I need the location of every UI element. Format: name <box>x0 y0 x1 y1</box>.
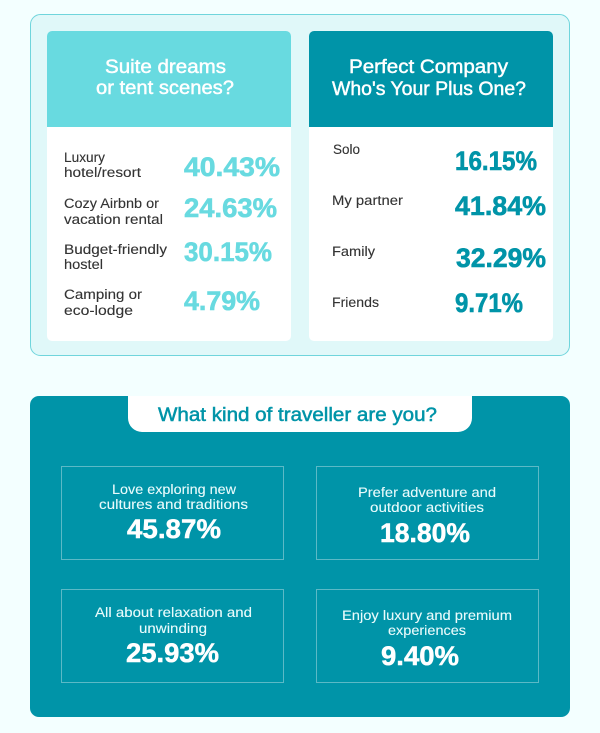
panel: suite dreams card <box>47 31 291 341</box>
row: airbnb: vacation rental <box>64 212 163 227</box>
row: my partner: My partner <box>332 193 404 208</box>
row: airbnb: Cozy Airbnb or <box>64 196 160 211</box>
row: solo <box>333 142 537 176</box>
card header: Who's Your Plus One? <box>332 79 526 100</box>
row: hostel: Budget-friendly <box>64 242 167 257</box>
row: friends: Friends <box>332 295 379 310</box>
row: hostel: 30.15% <box>184 237 272 267</box>
box: relaxation: 25.93% <box>126 638 219 668</box>
box: cultures: Love exploring new <box>112 482 236 497</box>
row: camping: Camping or <box>64 287 143 302</box>
row: friends <box>332 288 523 318</box>
box: adventure: 18.80% <box>380 518 470 548</box>
row: friends: 9.71% <box>455 288 523 318</box>
row: family: Family <box>332 244 375 259</box>
card header: Perfect Company <box>349 57 509 78</box>
card header <box>47 31 291 127</box>
panel: traveller type <box>30 396 570 717</box>
row: camping <box>64 286 260 318</box>
row: luxury hotel <box>64 150 280 182</box>
card header <box>309 31 553 127</box>
row: family: 32.29% <box>456 243 546 273</box>
panel: perfect company card <box>309 31 553 341</box>
row: my partner: 41.84% <box>455 191 546 221</box>
card body <box>309 31 553 341</box>
box: cultures: 45.87% <box>127 514 221 544</box>
row: camping: eco-lodge <box>64 303 133 318</box>
heading tab <box>128 396 472 432</box>
row: airbnb: 24.63% <box>184 193 277 223</box>
row: airbnb <box>64 193 277 227</box>
box: relaxation: All about relaxation and <box>95 605 252 620</box>
row: luxury hotel: 40.43% <box>184 152 280 182</box>
box: luxury: experiences <box>388 623 466 638</box>
box: relaxation: unwinding <box>139 621 207 636</box>
panel: accommodation and company <box>30 14 570 356</box>
row: family <box>332 243 546 273</box>
row: camping: 4.79% <box>184 286 260 316</box>
box: luxury <box>316 590 538 682</box>
card header: or tent scenes? <box>96 78 234 99</box>
box: relaxation <box>62 590 284 682</box>
row: hostel: hostel <box>64 257 103 272</box>
row: hostel <box>64 237 272 272</box>
box: adventure <box>316 466 538 560</box>
box: adventure: outdoor activities <box>370 500 484 515</box>
card body <box>47 31 291 341</box>
box: luxury: Enjoy luxury and premium <box>342 608 512 623</box>
row: my partner <box>332 191 546 221</box>
row: solo: 16.15% <box>455 146 537 176</box>
box: cultures: cultures and traditions <box>99 497 248 512</box>
card header: Suite dreams <box>105 57 226 78</box>
box: adventure: Prefer adventure and <box>358 485 496 500</box>
box: cultures <box>62 466 284 560</box>
box: luxury: 9.40% <box>381 641 459 671</box>
row: luxury hotel: hotel/resort <box>64 165 141 180</box>
row: luxury hotel: Luxury <box>64 150 105 165</box>
heading tab: What kind of traveller are you? <box>158 405 437 426</box>
row: solo: Solo <box>333 142 360 157</box>
